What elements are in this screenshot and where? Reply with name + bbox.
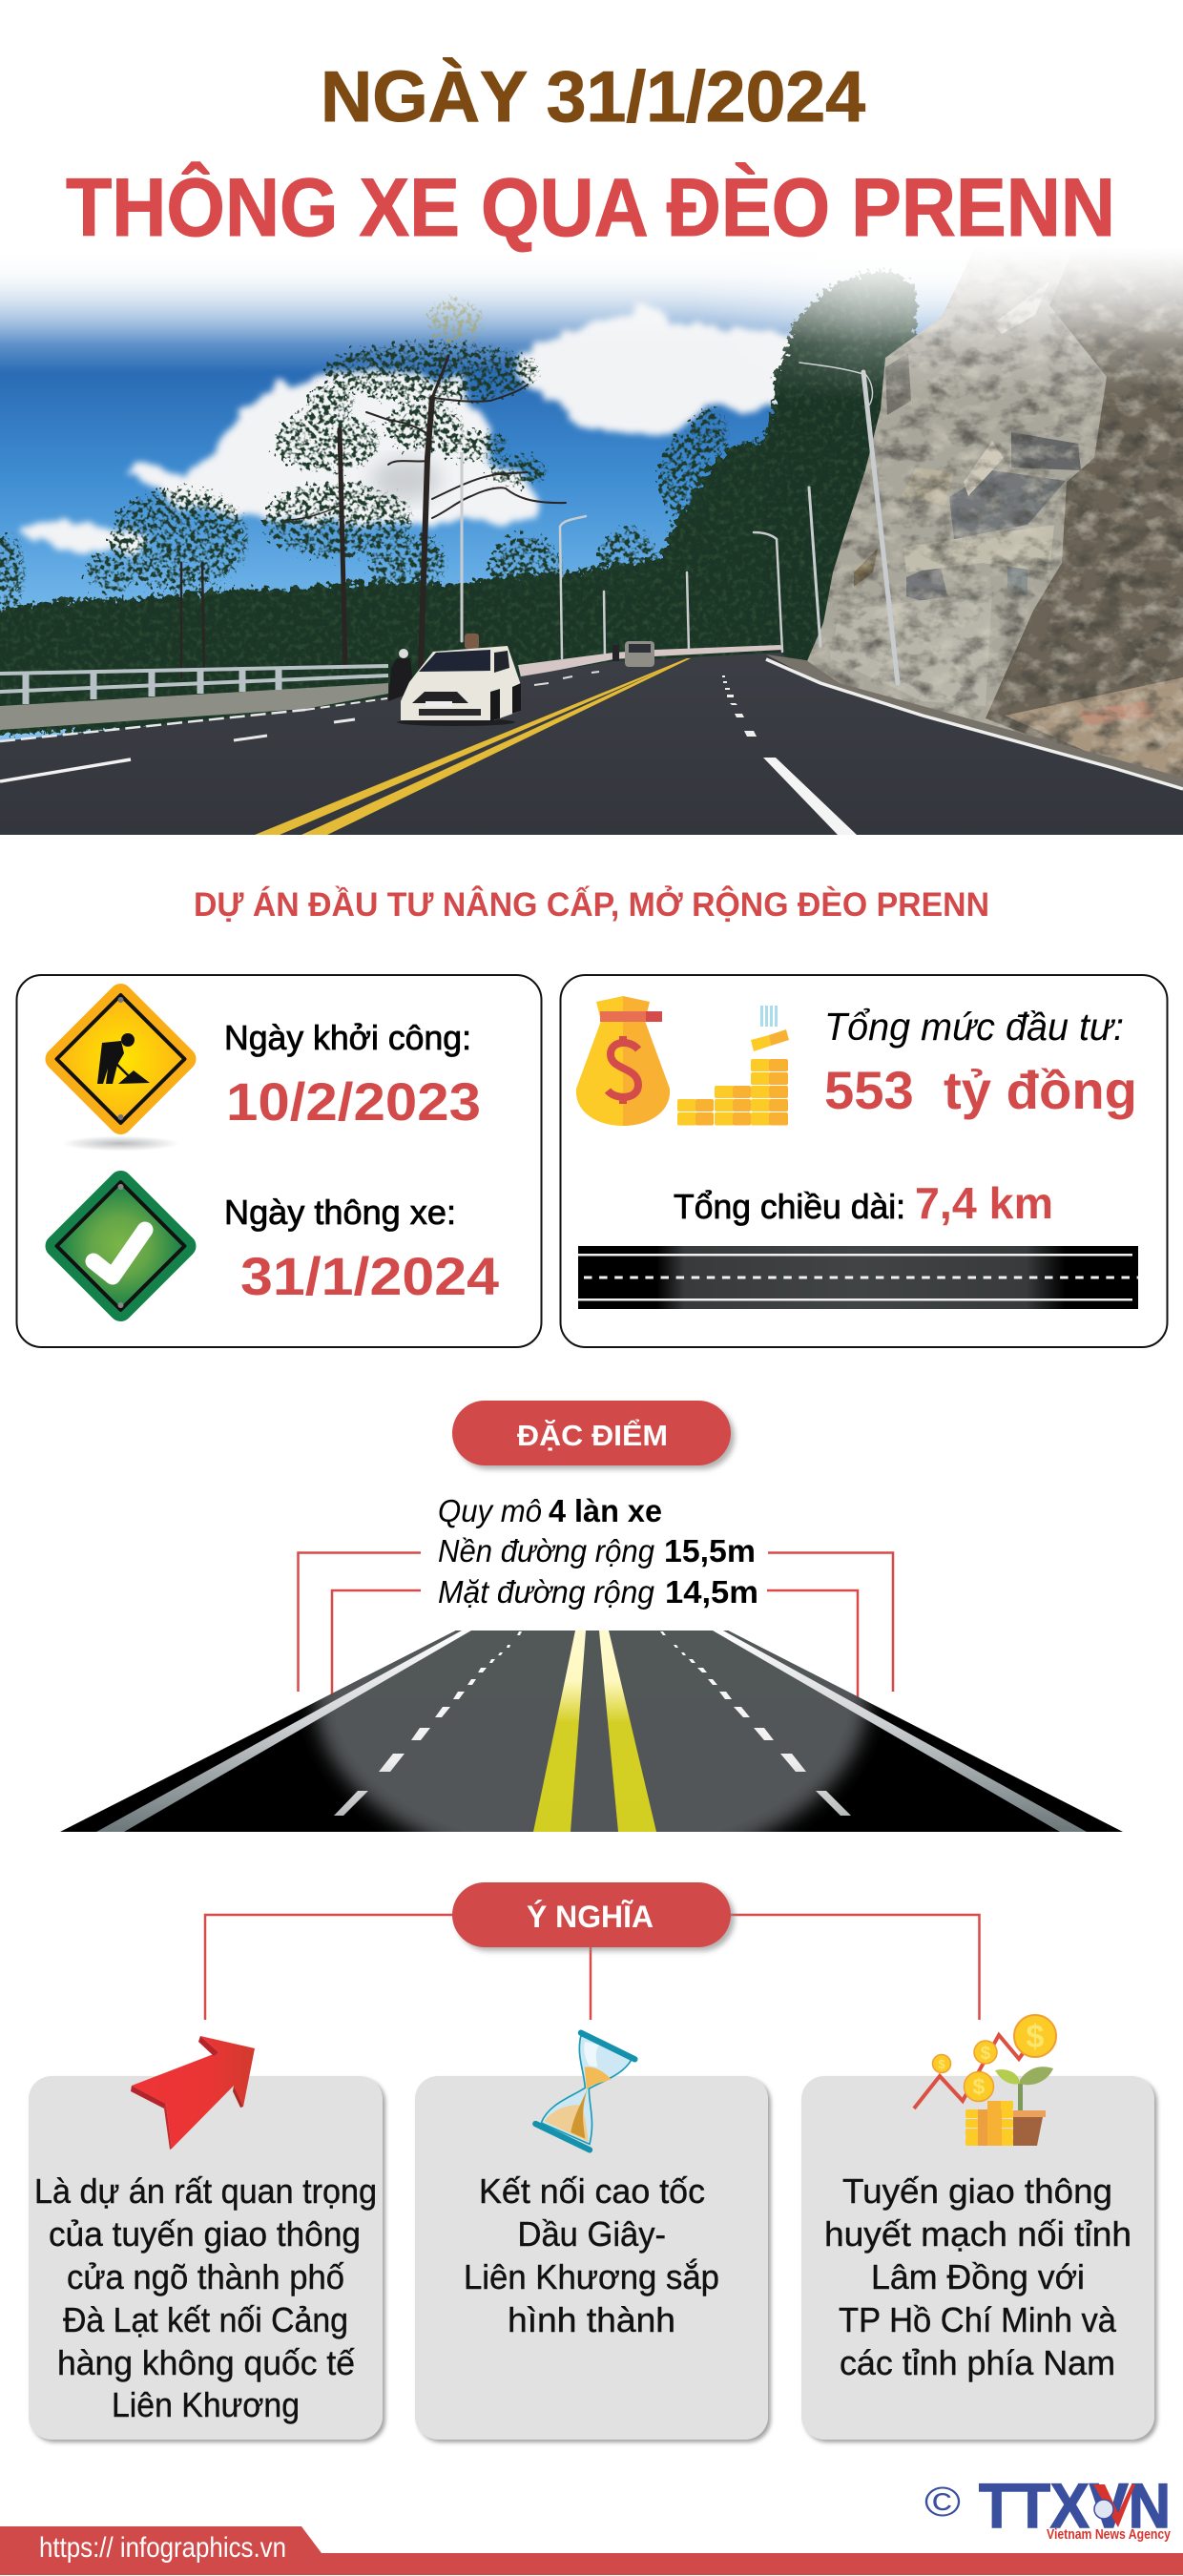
road width labels: 15,5m bbox=[664, 1533, 756, 1568]
card 3: các tỉnh phía Nam bbox=[840, 2343, 1115, 2382]
lamp posts bbox=[462, 363, 898, 683]
icon: growth coins and plant: $ bbox=[973, 2074, 986, 2099]
card 3 bbox=[801, 2076, 1154, 2440]
card 3: Tuyến giao thông bbox=[842, 2171, 1112, 2211]
value: start date: 10/2/2023 bbox=[226, 1071, 481, 1132]
road width labels: Nền đường rộng bbox=[438, 1533, 655, 1568]
far barrier bbox=[518, 645, 782, 677]
background hill and forest bbox=[0, 283, 916, 735]
rock cliff bbox=[804, 239, 1183, 789]
card 1: cửa ngõ thành phố bbox=[67, 2257, 344, 2296]
icon: road work sign bbox=[57, 995, 185, 1151]
section heading: characteristics bbox=[452, 1401, 731, 1465]
road width labels: Quy mô bbox=[438, 1493, 542, 1528]
logo: TTXVN: © bbox=[924, 2479, 961, 2525]
section heading: significance with connectors: Ý NGHĨA bbox=[527, 1900, 654, 1934]
card 1 bbox=[29, 2076, 383, 2440]
road shoulder and markings bbox=[0, 654, 1183, 835]
bridge barrier and railing bbox=[0, 666, 388, 730]
clouds bbox=[29, 309, 801, 552]
card 1: Đà Lạt kết nối Cảng bbox=[63, 2300, 348, 2339]
section heading: characteristics: ĐẶC ĐIỂM bbox=[517, 1419, 668, 1452]
icon: growth coins and plant: $ bbox=[938, 2057, 945, 2071]
icon: coin stacks bbox=[677, 1006, 789, 1126]
cars and riders bbox=[388, 634, 654, 726]
tree trunks and branches bbox=[181, 356, 566, 677]
road strip bbox=[578, 1246, 1138, 1309]
icon: growth coins and plant: $ bbox=[981, 2044, 991, 2064]
photo: Prenn pass road bbox=[0, 239, 1183, 835]
title line 1: NGÀY 31/1/2024 bbox=[321, 56, 865, 136]
card 1: của tuyến giao thông bbox=[49, 2214, 361, 2254]
dark pines beside the cliff bbox=[762, 267, 915, 439]
pine foliage bbox=[0, 343, 730, 609]
panel: dates bbox=[17, 975, 542, 1347]
road surface bbox=[0, 653, 1183, 835]
road width labels bbox=[438, 1493, 758, 1610]
icon: money bag bbox=[576, 996, 670, 1126]
road width labels: 4 làn xe bbox=[549, 1493, 662, 1528]
section heading: significance with connectors bbox=[205, 1882, 979, 2020]
icon: check sign bbox=[57, 1182, 185, 1310]
white fade at the top of photo bbox=[0, 246, 1183, 343]
icon: growth coins and plant: $ bbox=[1027, 2019, 1045, 2055]
value: opening date: 31/1/2024 bbox=[240, 1246, 499, 1306]
card 1: Là dự án rất quan trọng bbox=[34, 2171, 377, 2211]
icon: red arrow bbox=[131, 2036, 255, 2150]
road width labels: Mặt đường rộng bbox=[438, 1574, 655, 1610]
road illustration bbox=[60, 1631, 1123, 1832]
white fade over the top of the cliff and pines bbox=[727, 253, 1183, 393]
card 2: Kết nối cao tốc bbox=[479, 2171, 705, 2211]
label: total investment: Tổng mức đầu tư: bbox=[824, 1005, 1124, 1049]
footer band: https:// infographics.vn bbox=[39, 2532, 286, 2564]
card 2 bbox=[415, 2076, 768, 2440]
panel: investment and length bbox=[561, 975, 1168, 1347]
pine tree top, faded bbox=[431, 299, 485, 341]
label: total length: Tổng chiều dài: bbox=[674, 1187, 905, 1226]
footer band bbox=[0, 2526, 1183, 2575]
card 1: Liên Khương bbox=[112, 2385, 300, 2424]
logo: TTXVN: TTXVN bbox=[979, 2470, 1171, 2541]
card 1: hàng không quốc tế bbox=[57, 2343, 355, 2382]
callout lines for road widths bbox=[298, 1553, 893, 1700]
card 2: Dầu Giây- bbox=[517, 2214, 666, 2254]
subtitle: DỰ ÁN ĐẦU TƯ NÂNG CẤP, MỞ RỘNG ĐÈO PRENN bbox=[194, 885, 989, 924]
value: total length: 7,4 km bbox=[915, 1178, 1053, 1228]
label: opening date: Ngày thông xe: bbox=[224, 1193, 456, 1232]
card 3: TP Hồ Chí Minh và bbox=[839, 2300, 1117, 2339]
icon: hourglass bbox=[535, 2033, 634, 2150]
value: total investment: 553 tỷ đồng bbox=[824, 1060, 1137, 1120]
title line 2: THÔNG XE QUA ĐÈO PRENN bbox=[66, 162, 1115, 254]
icon: growth coins and plant bbox=[914, 2015, 1056, 2146]
label: start date: Ngày khởi công: bbox=[224, 1018, 471, 1057]
road width labels: 14,5m bbox=[665, 1574, 758, 1610]
card 2: Liên Khương sắp bbox=[464, 2257, 719, 2296]
card 3: Lâm Đồng với bbox=[871, 2257, 1085, 2296]
card 3: huyết mạch nối tỉnh bbox=[824, 2214, 1131, 2254]
card 2: hình thành bbox=[508, 2300, 675, 2339]
